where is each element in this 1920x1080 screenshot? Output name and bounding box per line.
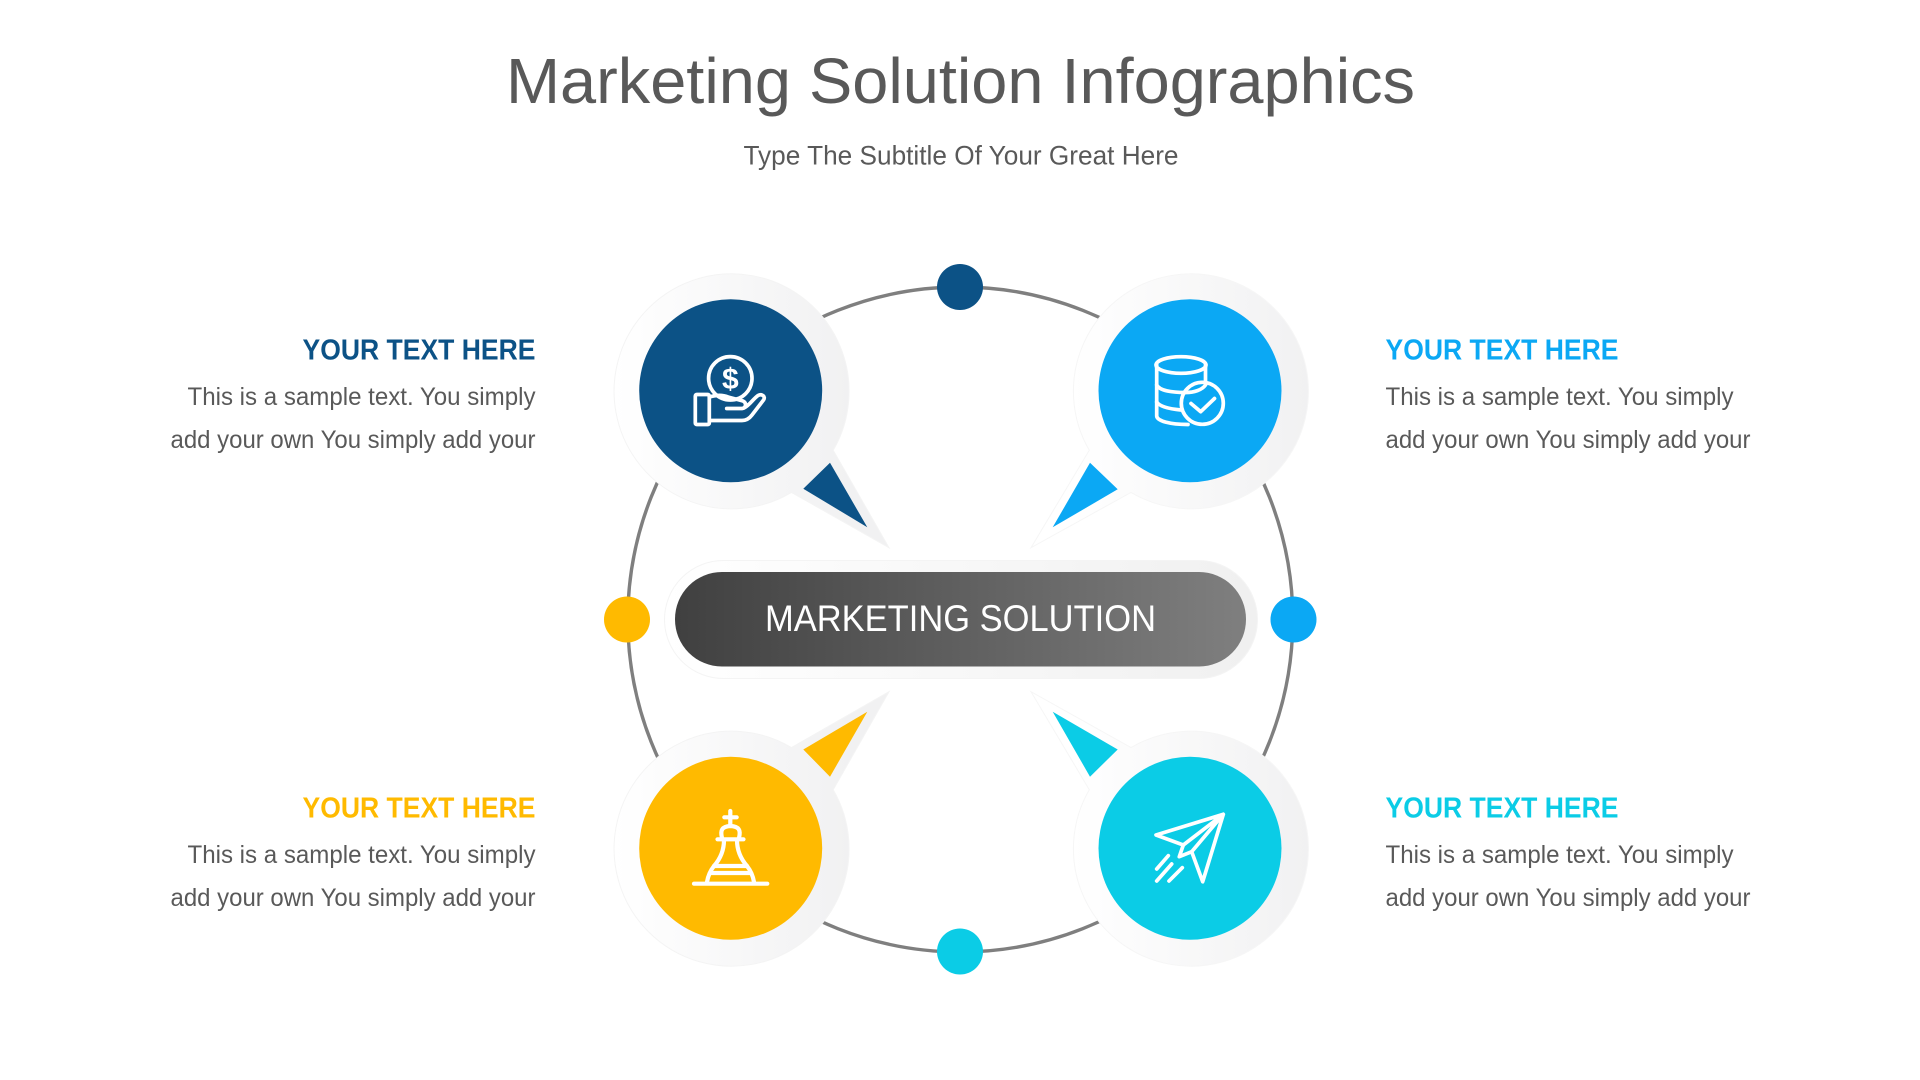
text block: top right: add your own You simply add your: [1386, 426, 1750, 454]
dot: left yellow: [604, 596, 650, 642]
icon: database with check: [1156, 357, 1223, 424]
text block: top right: [1386, 334, 1750, 454]
dot: bottom cyan: [937, 928, 983, 974]
text block: bottom right: add your own You simply add your: [1386, 884, 1750, 912]
text block: top left: This is a sample text. You simply: [188, 383, 536, 411]
text block: top left: [170, 334, 536, 454]
text block: bottom right: YOUR TEXT HERE: [1386, 792, 1618, 824]
text block: top left: add your own You simply add your: [170, 426, 536, 454]
badge: bottom right cyan: [1031, 692, 1308, 966]
title: Marketing Solution Infographics: [506, 45, 1415, 117]
text block: top right: This is a sample text. You simply: [1386, 383, 1734, 411]
icon: chess king: [694, 811, 767, 884]
text block: bottom left: This is a sample text. You simply: [188, 841, 536, 869]
badge: top left navy: [614, 274, 889, 548]
text block: top left: YOUR TEXT HERE: [302, 334, 536, 366]
connecting ring: [628, 287, 1293, 952]
center pill: MARKETING SOLUTION: [765, 598, 1156, 639]
center pill: [664, 560, 1258, 678]
badge: bottom left yellow: [614, 692, 889, 966]
icon: hand holding dollar coin: [695, 357, 764, 424]
text block: bottom right: This is a sample text. You simply: [1386, 841, 1734, 869]
icon: paper plane: [1156, 814, 1223, 882]
dot: top navy: [937, 264, 983, 310]
icon: hand holding dollar coin: $: [722, 363, 739, 396]
badge: top right blue: [1031, 274, 1308, 548]
text block: bottom left: YOUR TEXT HERE: [302, 792, 536, 824]
text block: bottom right: [1386, 792, 1750, 912]
text block: bottom left: [170, 792, 536, 912]
text block: top right: YOUR TEXT HERE: [1386, 334, 1618, 366]
text block: bottom left: add your own You simply add your: [170, 884, 536, 912]
dot: right blue: [1270, 596, 1316, 642]
subtitle: Type The Subtitle Of Your Great Here: [744, 140, 1178, 170]
